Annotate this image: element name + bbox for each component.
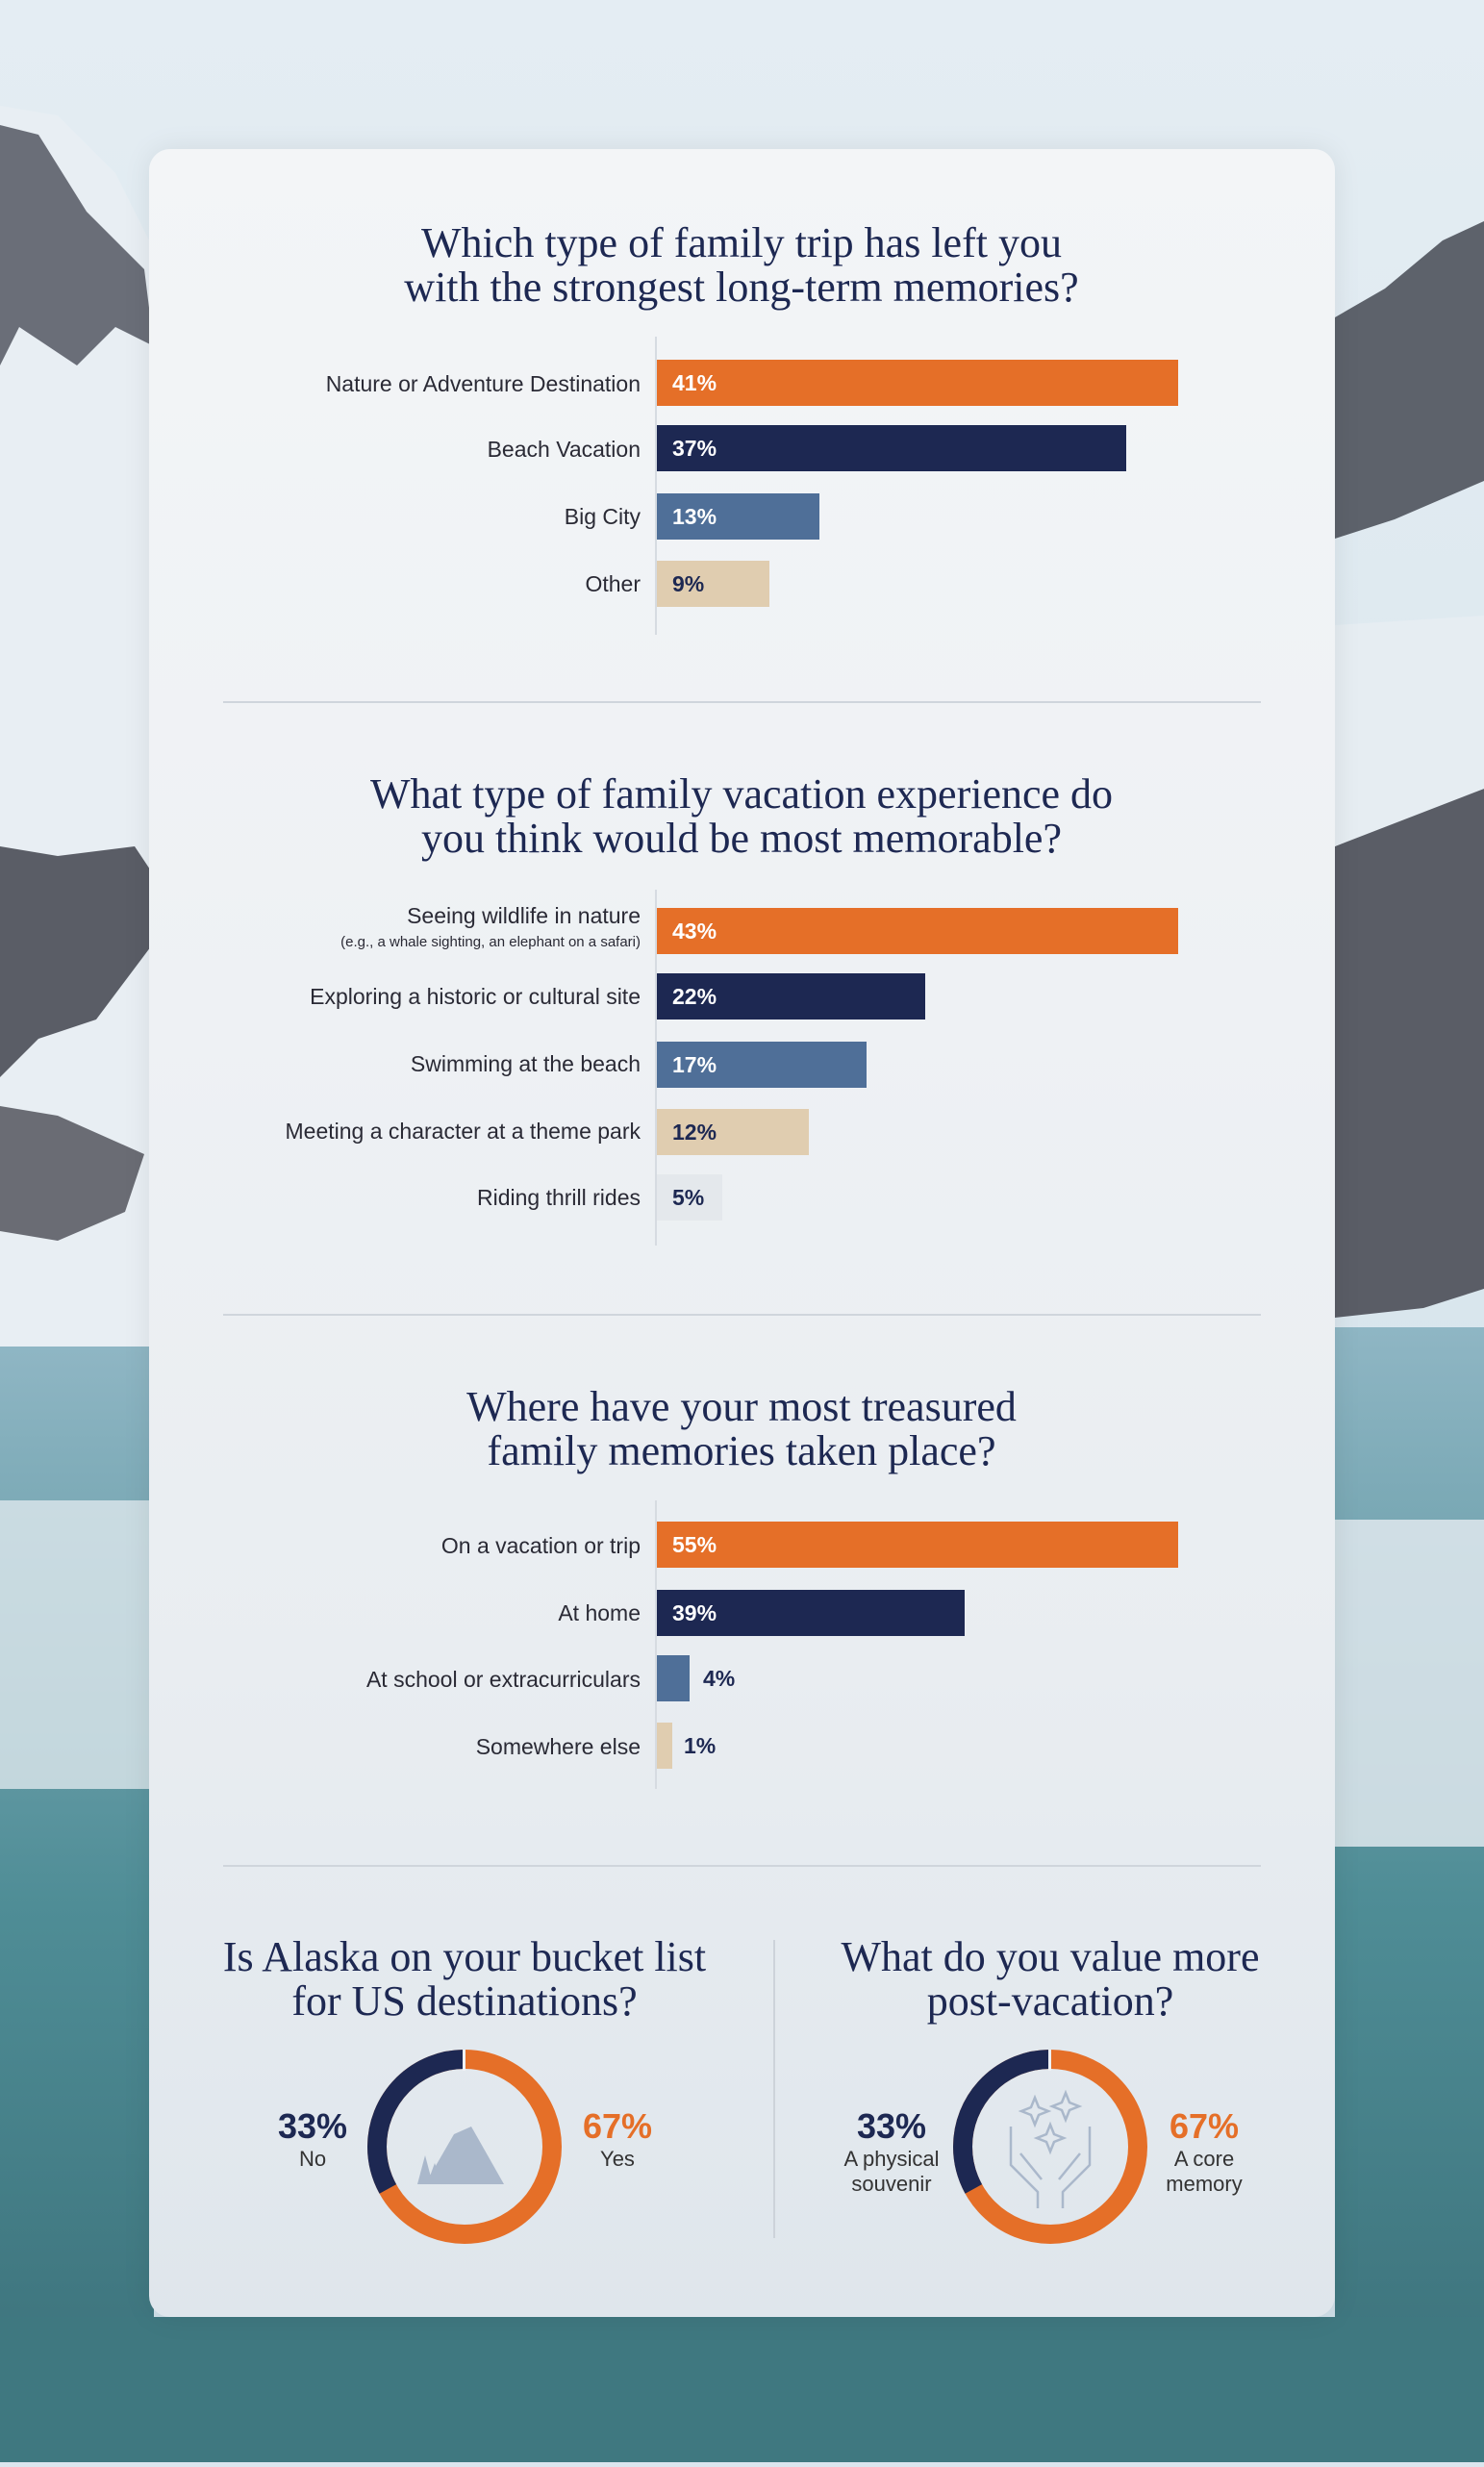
title: question 3: family memories taken place? bbox=[487, 1427, 996, 1474]
label: theme park: Meeting a character at a theme park bbox=[286, 1119, 641, 1144]
label: Seeing wildlife: Seeing wildlife in nature bbox=[407, 903, 641, 928]
bar: 41%: 41% bbox=[672, 370, 717, 395]
donut chart: souvenir vs memory: memory bbox=[1166, 2172, 1243, 2196]
bar: 12%: 12% bbox=[672, 1120, 717, 1145]
divider vertical bbox=[773, 1940, 775, 2238]
label: Seeing wildlife bbox=[340, 903, 641, 950]
bar: 22%: 22% bbox=[672, 984, 717, 1009]
donut chart: Alaska: Yes bbox=[600, 2147, 635, 2171]
bar: 9%: 9% bbox=[672, 571, 704, 596]
bar: 17%: 17% bbox=[672, 1052, 717, 1077]
bar: 39%: 39% bbox=[672, 1600, 717, 1625]
bar: 13%: 13% bbox=[672, 504, 717, 529]
label: somewhere else: Somewhere else bbox=[476, 1734, 641, 1759]
bar: 37% bbox=[657, 425, 1126, 471]
bar: 17% bbox=[657, 1042, 867, 1088]
title: value post-vacation: What do you value more bbox=[841, 1933, 1259, 1980]
title: question 2: you think would be most memorable? bbox=[421, 815, 1062, 862]
bar chart: treasured memories: 1% bbox=[684, 1733, 716, 1758]
title: question 1: with the strongest long-term memories? bbox=[404, 264, 1079, 311]
bar chart: memorable experience bbox=[286, 890, 1178, 1246]
stat: 33% No: 33% bbox=[278, 2106, 347, 2146]
card bbox=[149, 149, 1335, 2317]
donut chart: souvenir vs memory: souvenir bbox=[851, 2172, 932, 2196]
label: Nature or Adventure: Nature or Adventure Destination bbox=[326, 371, 641, 396]
label: vacation: On a vacation or trip bbox=[441, 1533, 641, 1558]
title: question 1 bbox=[404, 219, 1079, 311]
bar chart: treasured memories bbox=[366, 1500, 1178, 1789]
label: thrill rides: Riding thrill rides bbox=[477, 1185, 641, 1210]
label: Beach Vacation: Beach Vacation bbox=[488, 437, 641, 462]
donut chart: souvenir vs memory: A physical bbox=[843, 2147, 940, 2171]
bar: 9% bbox=[657, 561, 769, 607]
donut chart: souvenir vs memory: A core bbox=[1174, 2147, 1234, 2171]
label: school: At school or extracurriculars bbox=[366, 1667, 641, 1692]
donut chart: souvenir vs memory bbox=[843, 2050, 1243, 2244]
label: swimming: Swimming at the beach bbox=[411, 1051, 641, 1076]
icon: mountain bbox=[417, 2127, 504, 2184]
bar: 4% bbox=[657, 1655, 690, 1701]
label: home: At home bbox=[558, 1600, 641, 1625]
title: value post-vacation bbox=[841, 1933, 1259, 2025]
label: historic site: Exploring a historic or cultural site bbox=[310, 984, 641, 1009]
label: Seeing wildlife: (e.g., a whale sighting, an elephant on a safari) bbox=[340, 934, 641, 950]
bar: 12% bbox=[657, 1109, 809, 1155]
stat: 67% Yes: 67% bbox=[583, 2106, 652, 2146]
bar: 43%: 43% bbox=[672, 919, 717, 944]
bar: 37%: 37% bbox=[672, 436, 717, 461]
title: question 1: Which type of family trip has left you bbox=[421, 219, 1062, 266]
bar: 5% bbox=[657, 1174, 722, 1221]
bar chart: treasured memories: 4% bbox=[703, 1666, 735, 1691]
title: Alaska bucket list: Is Alaska on your bucket list bbox=[223, 1933, 706, 1980]
bar: 13% bbox=[657, 493, 819, 540]
stat: 33% physical souvenir: 33% bbox=[857, 2106, 926, 2146]
label: Big City: Big City bbox=[565, 504, 641, 529]
title: Alaska bucket list: for US destinations? bbox=[291, 1977, 638, 2025]
title: question 3: Where have your most treasured bbox=[466, 1383, 1017, 1430]
bar: 39% bbox=[657, 1590, 965, 1636]
bar: 5%: 5% bbox=[672, 1185, 704, 1210]
title: question 3 bbox=[466, 1383, 1017, 1474]
icon: hands with sparkles bbox=[1011, 2093, 1090, 2208]
stat: 67% core memory: 67% bbox=[1170, 2106, 1239, 2146]
label: Other: Other bbox=[585, 571, 641, 596]
bar: 55%: 55% bbox=[672, 1532, 717, 1557]
title: Alaska bucket list bbox=[223, 1933, 706, 2025]
title: question 2: What type of family vacation experience do bbox=[370, 770, 1113, 818]
bar: 41% bbox=[657, 360, 1178, 406]
donut chart: Alaska: No bbox=[299, 2147, 326, 2171]
bar: 43% bbox=[657, 908, 1178, 954]
bar chart: family trip memories bbox=[326, 337, 1178, 635]
bar: 55% bbox=[657, 1522, 1178, 1568]
bar: 1% bbox=[657, 1723, 672, 1769]
bar: 22% bbox=[657, 973, 925, 1020]
title: value post-vacation: post-vacation? bbox=[927, 1977, 1173, 2025]
title: question 2 bbox=[370, 770, 1113, 862]
donut chart: Alaska bbox=[278, 2050, 652, 2244]
